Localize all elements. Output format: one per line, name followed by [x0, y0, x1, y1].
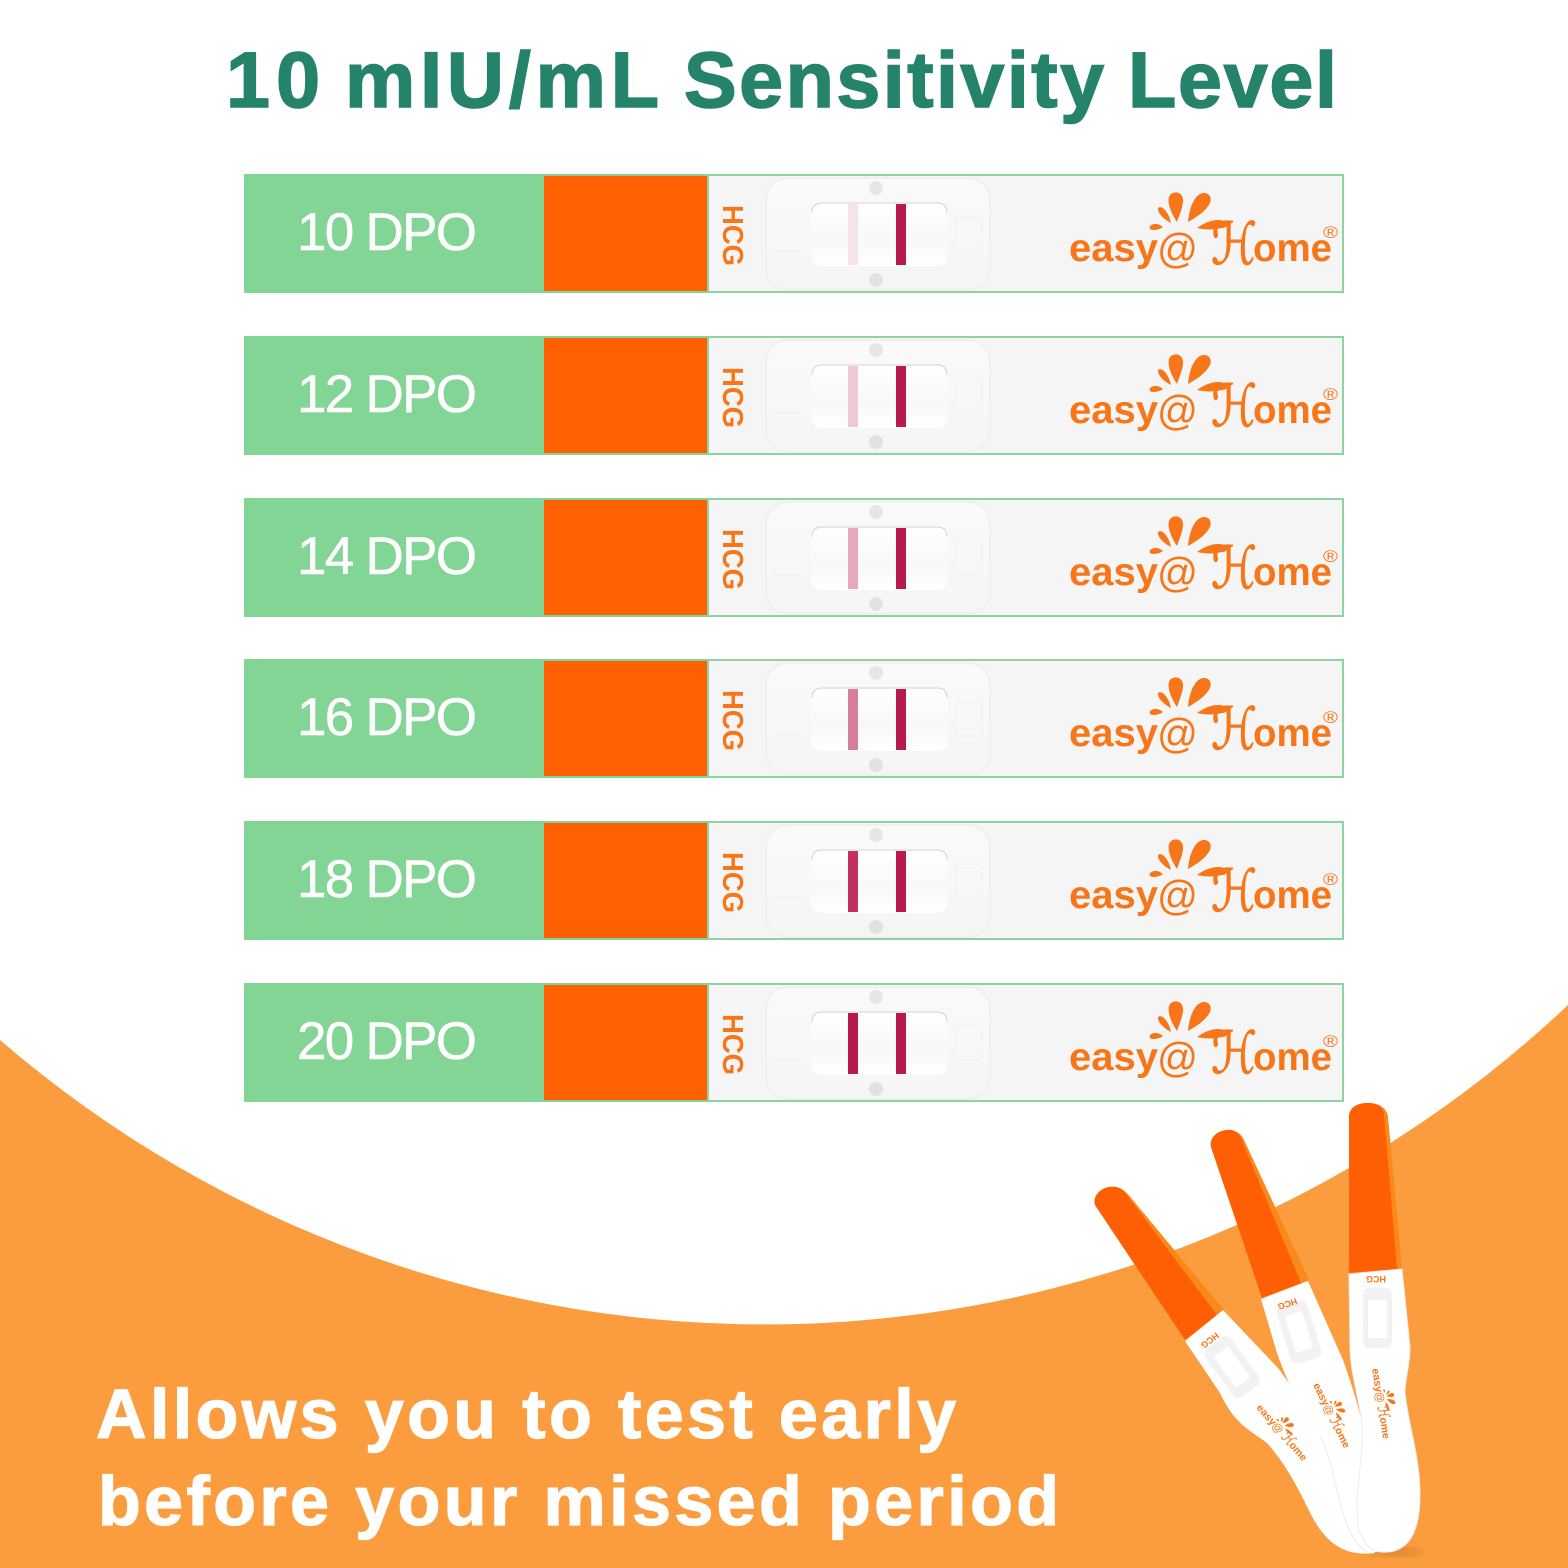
stick: left: ℋ	[1278, 1428, 1300, 1449]
stick: middle: easy	[1310, 1381, 1332, 1408]
row: 18 DPO: easy	[1069, 874, 1158, 917]
row: 18 DPO: ®	[1323, 870, 1339, 889]
row: 10 DPO: ome	[1253, 227, 1332, 270]
row: 16 DPO: ®	[1323, 708, 1339, 727]
row: 16 DPO: ome	[1253, 712, 1332, 755]
row: 10 DPO: 10 DPO	[297, 203, 477, 262]
row: 14 DPO: ℋ	[1211, 534, 1257, 602]
orange curved background	[0, 1005, 1568, 1568]
stick: middle: @	[1320, 1403, 1336, 1418]
row: 16 DPO: 16 DPO	[297, 688, 477, 747]
stick: right: @	[1372, 1391, 1386, 1404]
row: 14 DPO	[244, 498, 1343, 617]
row: 20 DPO: easy	[1069, 1036, 1158, 1079]
row: 18 DPO: @	[1157, 872, 1198, 919]
row: 20 DPO: 20 DPO	[297, 1012, 477, 1071]
row: 10 DPO: HCG	[716, 205, 748, 266]
stick: left: easy	[1254, 1402, 1279, 1428]
row: 14 DPO: @	[1157, 549, 1198, 596]
row: 18 DPO: ome	[1253, 874, 1332, 917]
row: 20 DPO: ℋ	[1211, 1019, 1257, 1087]
row: 20 DPO: @	[1157, 1034, 1198, 1081]
stick: right: ℋ	[1373, 1405, 1394, 1420]
row: 12 DPO: HCG	[716, 367, 748, 428]
row: 20 DPO: HCG	[716, 1014, 748, 1075]
row: 14 DPO: HCG	[716, 529, 748, 590]
row: 20 DPO: ®	[1323, 1032, 1339, 1051]
row: 18 DPO: HCG	[716, 852, 748, 913]
row: 16 DPO: ℋ	[1211, 695, 1257, 763]
row: 12 DPO: ®	[1323, 385, 1339, 404]
stick: right: ome	[1377, 1417, 1392, 1440]
row: 20 DPO: ome	[1253, 1036, 1332, 1079]
row: 10 DPO: @	[1157, 225, 1198, 272]
title	[226, 35, 1337, 124]
title: mIU/mL	[345, 35, 659, 124]
row: 16 DPO: @	[1157, 710, 1198, 757]
row: 10 DPO: ℋ	[1211, 210, 1257, 278]
row: 14 DPO: easy	[1069, 551, 1158, 594]
test sticks illustration	[1095, 1103, 1423, 1556]
stick: left: ome	[1286, 1440, 1309, 1464]
title: Sensitivity	[684, 35, 1104, 124]
bottom headline: Allows you to test early	[96, 1375, 956, 1453]
row: 18 DPO: 18 DPO	[297, 850, 477, 909]
title: 10	[226, 35, 320, 124]
row: 12 DPO: ℋ	[1211, 372, 1257, 440]
row: 12 DPO: easy	[1069, 389, 1158, 432]
title: Level	[1128, 35, 1337, 124]
row: 10 DPO: ®	[1323, 223, 1339, 242]
bottom headline	[96, 1375, 1059, 1540]
row: 10 DPO	[244, 174, 1343, 293]
row: 16 DPO: HCG	[716, 690, 748, 751]
row: 12 DPO: 12 DPO	[297, 365, 477, 424]
row: 14 DPO: ®	[1323, 547, 1339, 566]
stick: left: HCG	[1199, 1330, 1221, 1350]
stick: left	[1095, 1187, 1375, 1554]
row: 10 DPO: easy	[1069, 227, 1158, 270]
row: 20 DPO	[244, 983, 1343, 1102]
row: 12 DPO: ome	[1253, 389, 1332, 432]
row: 18 DPO: ℋ	[1211, 857, 1257, 925]
stick: right: HCG	[1366, 1274, 1386, 1284]
stick: middle: ome	[1332, 1426, 1352, 1450]
stick: middle: ℋ	[1325, 1413, 1348, 1433]
row: 18 DPO	[244, 821, 1343, 940]
stick: right	[1349, 1103, 1420, 1552]
stick: middle: HCG	[1276, 1296, 1298, 1312]
bottom headline: before your missed period	[98, 1462, 1059, 1540]
stick: left: @	[1269, 1420, 1285, 1437]
row: 12 DPO: @	[1157, 387, 1198, 434]
row: 14 DPO: ome	[1253, 551, 1332, 594]
row: 16 DPO	[244, 659, 1343, 778]
row: 16 DPO: easy	[1069, 712, 1158, 755]
row: 14 DPO: 14 DPO	[297, 527, 477, 586]
stick: right: easy	[1369, 1368, 1385, 1393]
stick: middle	[1211, 1130, 1385, 1552]
row: 12 DPO	[244, 336, 1343, 455]
